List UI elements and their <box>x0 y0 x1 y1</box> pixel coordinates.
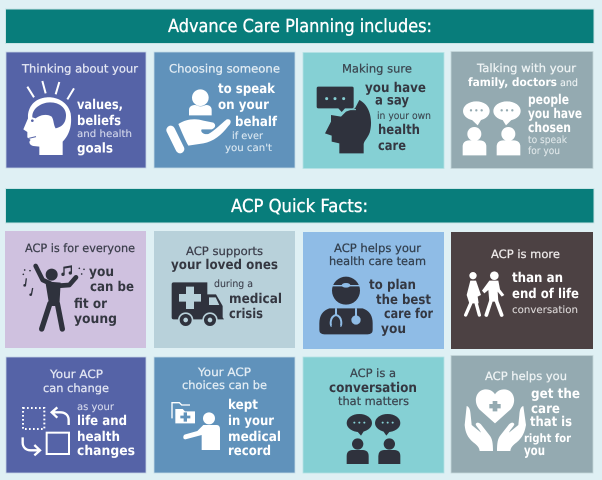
text: during a medical crisis: during a <box>214 279 253 290</box>
heading: your ACP can change <box>43 367 109 395</box>
text: you can be fit or young: can be <box>90 279 134 295</box>
banner: Advance Care Planning includes <box>6 9 594 44</box>
text: during a medical crisis: crisis <box>229 306 263 322</box>
text: people you have chosen <box>528 92 582 157</box>
text: to plan the best care for you: the best <box>376 292 431 308</box>
text: kept in your medical record: record <box>228 443 271 459</box>
text: than an end of life conversation <box>512 270 579 316</box>
text: people you have chosen: people <box>528 92 569 108</box>
heading: your ACP can change: can change <box>43 381 109 395</box>
heading: talking with your family, doctors: Talking with your <box>476 61 576 75</box>
panel: ACP is a conversation <box>303 357 444 473</box>
icon: hands holding heart <box>465 389 526 451</box>
icon: squares with arrows <box>23 407 69 455</box>
icon: head with brain <box>23 81 74 155</box>
icon: doctor with stethoscope <box>319 277 373 334</box>
text: get the care that is right for you: care <box>531 401 560 417</box>
text: than an end of life conversation: conversation <box>512 305 578 316</box>
heading: ACP is more: ACP is more <box>491 247 560 261</box>
text: as your life and health changes <box>77 402 135 459</box>
text: values and beliefs: values, <box>77 97 123 113</box>
text: to plan the best care for you: you <box>381 321 406 337</box>
text: to speak on your behalf: behalf <box>235 114 277 130</box>
text: get the care that is right for you: right for <box>524 431 571 445</box>
text: you can be fit or young: you <box>89 264 114 280</box>
text: people you have chosen: chosen <box>528 120 571 136</box>
heading: talking with your family, doctors: family, doctors <box>468 75 557 89</box>
heading: your ACP choices can be: Your ACP <box>197 365 251 379</box>
text: to speak on your behalf: you can't <box>225 143 272 154</box>
heading: ACP supports your loved ones <box>171 244 278 273</box>
panel: ACP helps your health care team <box>303 232 444 349</box>
text: get the care that is right for you: get the <box>531 386 580 402</box>
heading: thinking about your: Thinking about your <box>21 62 138 76</box>
heading: ACP helps you: ACP helps you <box>485 369 567 383</box>
text: as your life and health changes: life and <box>77 413 127 429</box>
text: kept in your medical record: in your <box>228 413 274 429</box>
heading: ACP supports your loved ones: your loved ones <box>171 257 278 273</box>
text: you have a say: you have <box>365 80 426 96</box>
text: get the care that is right for you: that is <box>530 414 572 430</box>
panel: making sure you have a say <box>303 52 444 168</box>
icon: ambulance <box>172 282 224 328</box>
text: values and beliefs: and health <box>77 129 132 140</box>
heading: talking with your family, doctors: and <box>560 78 578 89</box>
text: kept in your medical record <box>228 397 281 459</box>
heading: ACP is for everyone: ACP is for everyone <box>25 241 135 255</box>
banner: ACP Quick Facts: ACP Quick Facts: <box>231 196 368 217</box>
icon: dancing person with music notes <box>22 266 85 329</box>
panel: choosing someone <box>154 52 295 168</box>
heading: ACP is a conversation that matters: that matters <box>338 394 409 408</box>
text: to plan the best care for you: to plan <box>369 277 416 293</box>
text: you have a say <box>365 80 431 154</box>
text: kept in your medical record: kept <box>228 397 258 413</box>
text: during a medical crisis: medical <box>229 291 282 307</box>
icon: two people walking <box>466 271 504 315</box>
text: you can be fit or young: young <box>74 311 117 327</box>
text: during a medical crisis <box>214 279 282 322</box>
panel: ACP helps you <box>451 356 593 473</box>
heading: your ACP choices can be <box>182 365 267 392</box>
panel: talking with your family <box>451 52 593 168</box>
banner: Advance Care Planning includes: Advance Care Planning includes: <box>168 16 432 37</box>
icon: two people talking <box>347 414 400 464</box>
text: to speak on your behalf: to speak <box>218 81 276 97</box>
text: values and beliefs <box>77 97 132 156</box>
icon: hand holding person <box>171 89 231 149</box>
text: values and beliefs: beliefs <box>77 113 121 129</box>
text: you can be fit or young <box>74 264 134 327</box>
panel: ACP is for everyone <box>5 231 146 348</box>
heading: your ACP choices can be: choices can be <box>182 378 267 392</box>
panel: ACP is more <box>451 232 593 349</box>
text: get the care that is right for you <box>524 386 580 459</box>
text: kept in your medical record: medical <box>228 429 281 445</box>
text: to speak on your behalf: if ever <box>232 131 264 142</box>
text: to plan the best care for you <box>369 277 433 337</box>
text: than an end of life conversation: than an <box>512 270 563 286</box>
text: people you have chosen: for you <box>528 146 560 157</box>
text: to speak on your behalf <box>218 81 277 154</box>
text: than an end of life conversation: end of life <box>512 286 579 302</box>
heading: ACP helps your health care team: health care team <box>329 254 426 268</box>
text: you can be fit or young: fit or <box>74 296 107 312</box>
text: as your life and health changes: changes <box>77 443 135 459</box>
heading: ACP helps your health care team <box>329 241 426 268</box>
heading: choosing someone: Choosing someone <box>169 62 280 76</box>
icon: two people with speech bubbles <box>463 101 521 155</box>
text: you have a say: health <box>378 122 420 138</box>
text: as your life and health changes: as your <box>77 402 115 413</box>
heading: your ACP can change: Your ACP <box>49 367 103 381</box>
text: get the care that is right for you: you <box>524 443 545 459</box>
panel: your ACP can change <box>6 357 146 473</box>
heading: ACP helps your health care team: ACP helps your <box>334 241 421 255</box>
text: you have a say: in your own <box>377 111 431 122</box>
icon: folder and person <box>172 403 220 450</box>
heading: ACP is a conversation that matters: conversation <box>329 380 417 396</box>
text: to plan the best care for you: care for <box>384 306 433 322</box>
text: people you have chosen: you have <box>528 106 582 122</box>
text: you have a say: care <box>378 138 406 154</box>
panel: your ACP choices <box>154 357 295 473</box>
heading: ACP is a conversation that matters <box>329 366 417 408</box>
text: as your life and health changes: health <box>77 429 120 445</box>
text: people you have chosen: to speak <box>528 135 567 146</box>
text: values and beliefs: goals <box>77 140 113 156</box>
heading: making sure: Making sure <box>342 62 412 76</box>
heading: talking with your family, doctors <box>468 61 578 89</box>
text: you have a say: a say <box>375 92 409 108</box>
panel: ACP supports your loved ones <box>154 231 295 348</box>
panel: thinking about values <box>6 52 146 168</box>
text: to speak on your behalf: on your <box>218 97 269 113</box>
heading: ACP supports your loved ones: ACP supports <box>186 244 263 258</box>
icon: head with speech bubble <box>317 87 371 153</box>
banner: ACP Quick Facts <box>6 188 594 223</box>
heading: ACP is a conversation that matters: ACP is a <box>350 366 396 380</box>
